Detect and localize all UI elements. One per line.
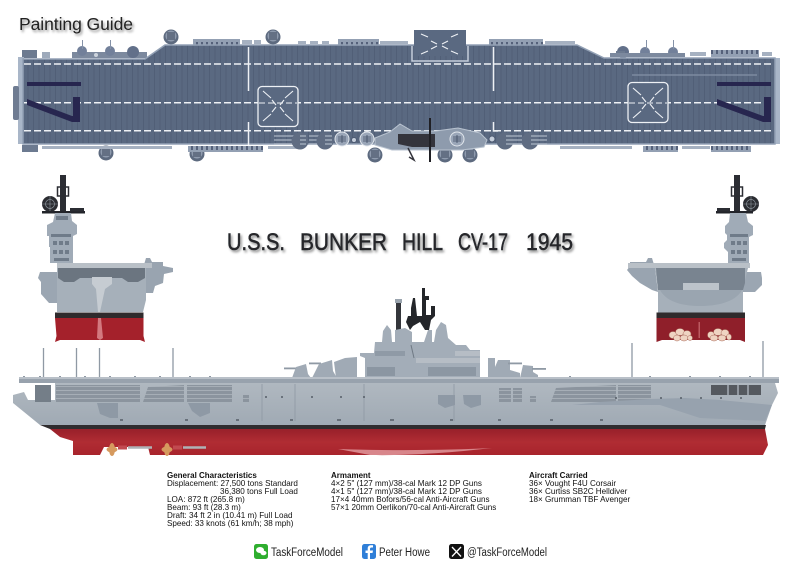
port gun sponsons [627,258,658,292]
text block: aircraft carried: Aircraft Carried [529,471,588,480]
title word: BUNKER: BUNKER [300,229,387,256]
text block: armament: 57×1 20mm Oerlikon/70-cal Anti-Aircraft Guns [331,503,496,512]
gun sponsons on hull [97,395,481,418]
social links [254,544,547,559]
bow apron [775,58,780,144]
boot topping [55,312,144,318]
port sponsons [38,272,58,303]
title word: HILL: HILL [402,229,443,256]
red hull [55,318,145,342]
island superstructure [360,288,480,378]
stern hangar openings [35,385,232,402]
text block: armament: 4×2 5" (127 mm)/38-cal Mark 12 DP Guns [331,479,482,488]
icon: wechat [254,544,268,559]
deck white cross lines [248,47,498,145]
text block: armament: Armament [331,471,371,480]
deck number 17 stern [27,82,81,122]
label: wechat: TaskForceModel [271,547,343,559]
text block: general characteristics: General Characteristics [167,471,257,480]
label: x: @TaskForceModel [467,547,547,559]
top view: flight deck plan [13,30,780,162]
bow stem red [97,318,103,340]
mast and radar [716,175,759,214]
boot topping [656,312,745,318]
island tower details [51,216,71,261]
turrets forward of island [488,358,546,378]
upper edge sponsons and gun tubs [22,30,772,58]
bow shading [572,398,772,421]
forward gun sponsons [143,258,173,293]
turrets aft of island [284,357,357,378]
bow stem [92,277,112,312]
text block: general characteristics: LOA: 872 ft (265.8 m) [167,495,245,504]
text block: general characteristics: Speed: 33 knots (61 km/h; 38 mph) [167,519,294,528]
propellers [669,328,732,341]
red hull [656,318,745,342]
label: facebook: Peter Howe [379,547,430,559]
stern curve [660,290,742,306]
bilge keel highlights [338,448,492,455]
hangar gallery [58,268,145,282]
shaft tubes [128,446,206,449]
island tower [47,213,77,263]
hull upper [57,268,146,312]
text block: general characteristics: Draft: 34 ft 2 in (10.41 m) Full Load [167,511,293,520]
title word: CV-17: CV-17 [458,229,508,256]
side elevation of the ship [13,288,779,456]
text block: aircraft carried: 36× Vought F4U Corsair [529,479,616,488]
propeller shafts [118,446,182,450]
flight deck [19,376,779,383]
gray hull [13,383,778,425]
boot topping [40,425,766,429]
propellers [106,443,172,456]
title [227,229,573,256]
forward elevator [628,82,668,122]
text block: general characteristics: Beam: 93 ft (28.3 m) [167,503,241,512]
left front view: bow elevation [38,175,173,342]
forward hangar openings [551,385,761,402]
text block: armament: 4×1 5" (127 mm)/38-cal Mark 12 DP Guns [331,487,482,496]
hull louvres [243,388,536,402]
flight deck edge [57,263,152,268]
deck edge elevator [412,30,468,61]
hangar gallery [656,268,745,290]
icon: facebook [362,544,376,559]
mast and radar [42,175,85,214]
right front view: stern elevation [627,175,762,342]
flight deck edge [628,263,750,268]
island tower [724,213,753,263]
text block: aircraft carried: 36× Curtiss SB2C Helldiver [529,487,628,496]
deck surface [23,45,775,144]
stern platform [13,86,19,120]
stern platform [683,283,719,290]
island tower details [730,234,748,261]
text block: aircraft carried: 18× Grumman TBF Avenger [529,495,630,504]
starboard sponsons [743,272,762,292]
rear elevator [258,86,298,126]
title word: U.S.S.: U.S.S. [227,229,285,256]
lower edge sponsons and gun tubs [22,145,751,162]
text block: armament: 17×4 40mm Bofors/56-cal Anti-Aircraft Guns [331,495,490,504]
red lower hull [50,429,768,455]
island and turrets plan [274,118,547,162]
deck dashed guide lines [24,64,774,131]
deck number 17 bow [717,82,771,122]
text block: general characteristics: Displacement: 27,500 tons Standard [167,479,298,488]
radio masts [44,341,763,378]
title word: 1945: 1945 [526,229,573,256]
catapult track [632,74,757,76]
stern apron [18,57,24,144]
rudder line [698,322,700,338]
hull upper [655,268,748,312]
hull seams and portholes [120,384,742,421]
heading: Painting Guide: Painting Guide [19,14,133,34]
text block: general characteristics: 36,380 tons Full Load [220,487,298,496]
icon: x [449,544,464,559]
